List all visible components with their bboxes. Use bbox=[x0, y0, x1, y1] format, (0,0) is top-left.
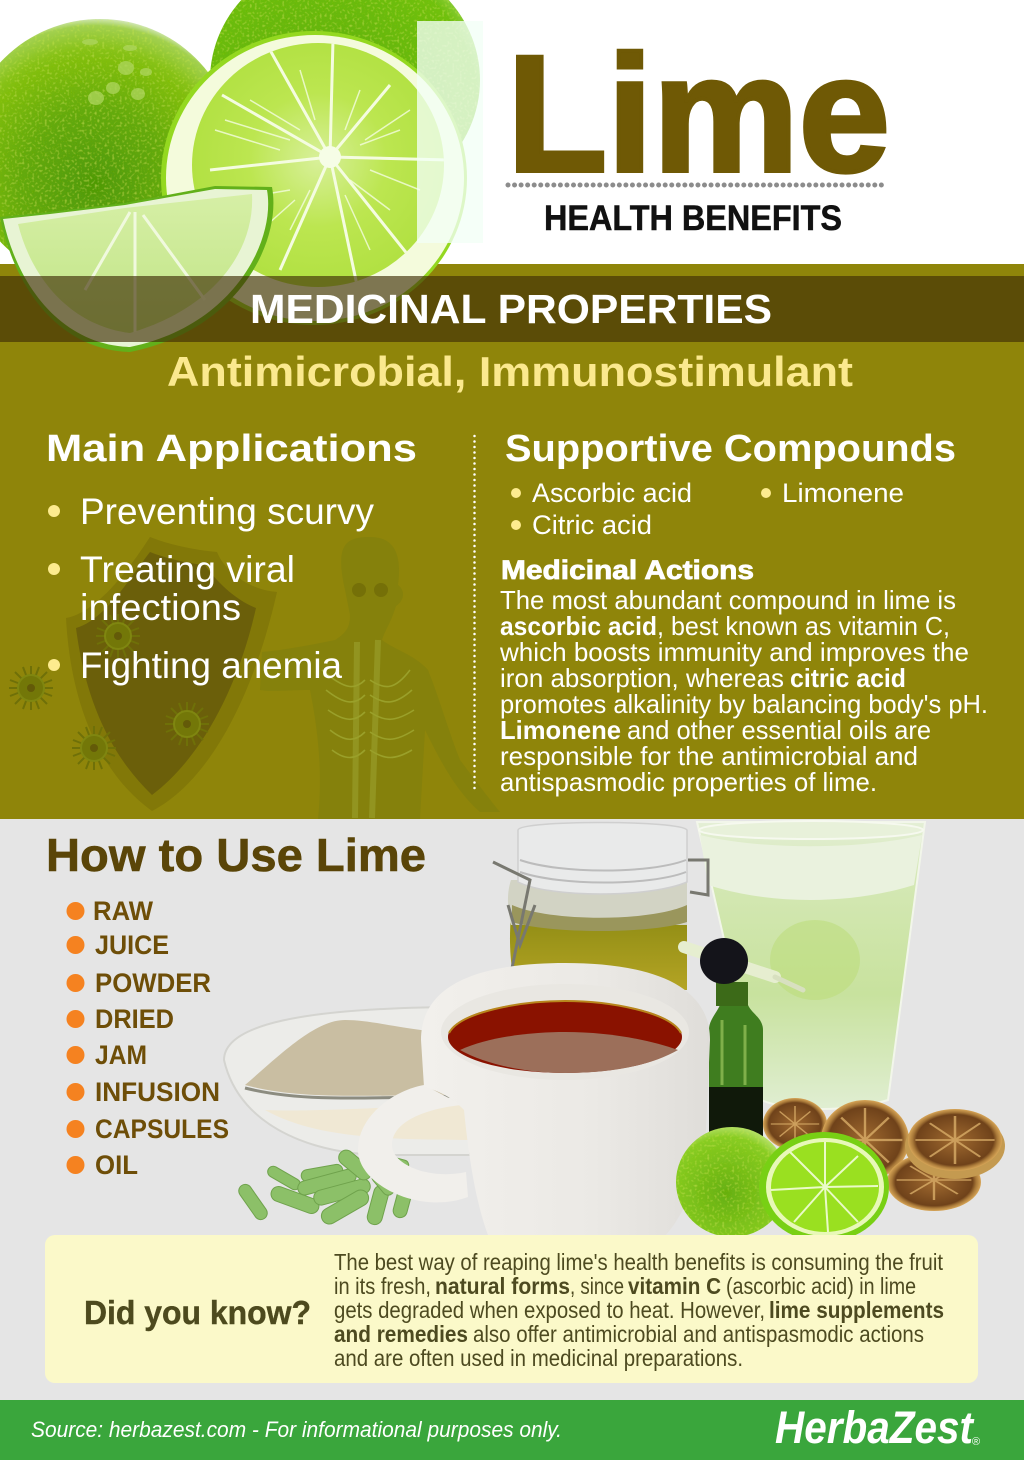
list: forms of use: DRIED bbox=[95, 1004, 174, 1034]
dotted column divider bbox=[473, 436, 476, 792]
item: treating viral infections bbox=[48, 549, 295, 628]
list: forms of use: JAM bbox=[95, 1040, 147, 1070]
text block: medicinal actions: responsible for the antimicrobial and bbox=[500, 741, 918, 771]
text block: medicinal actions: Limonene bbox=[500, 715, 621, 745]
viruses bbox=[9, 614, 209, 770]
text block: did you know: and remedies bbox=[334, 1321, 468, 1347]
list: compounds bbox=[511, 478, 904, 540]
illustration: lime preparations bbox=[224, 821, 1005, 1242]
logo: HerbaZest: ® bbox=[972, 1436, 980, 1448]
text block: medicinal actions: ascorbic acid bbox=[500, 611, 657, 641]
list: forms of use: RAW bbox=[93, 896, 153, 926]
lime wedge bbox=[0, 186, 273, 352]
text block: did you know bbox=[334, 1249, 944, 1371]
text block: medicinal actions: , best known as vitamin C, bbox=[657, 611, 950, 641]
jar of oil bbox=[493, 822, 708, 990]
heading: how to use lime: How to Use Lime bbox=[46, 829, 426, 881]
heading: supportive compounds: Supportive Compounds bbox=[505, 428, 956, 470]
text block: did you know: vitamin C bbox=[628, 1273, 721, 1299]
heading: did you know: Did you know? bbox=[84, 1294, 311, 1331]
text block: did you know: in its fresh, bbox=[334, 1273, 431, 1299]
text block: did you know: , since bbox=[570, 1273, 624, 1299]
text block: medicinal actions: and other essential oils are bbox=[627, 715, 931, 745]
halved lime bbox=[161, 31, 467, 325]
item: treating viral infections: infections bbox=[80, 587, 241, 628]
small lime half bbox=[759, 1132, 889, 1242]
text block: did you know: and are often used in medicinal preparations. bbox=[334, 1345, 743, 1371]
text block: did you know: natural forms bbox=[435, 1273, 570, 1299]
dotted divider under title bbox=[508, 182, 885, 188]
small whole lime bbox=[676, 1127, 788, 1237]
list: compounds: Limonene bbox=[782, 478, 904, 508]
text block: did you know: lime supplements bbox=[769, 1297, 944, 1323]
list: forms of use bbox=[66, 896, 229, 1180]
subheading: properties list: Antimicrobial, Immunostimulant bbox=[167, 348, 853, 395]
white header background bbox=[0, 0, 1024, 264]
list: compounds: Ascorbic acid bbox=[532, 478, 692, 508]
list: forms of use: CAPSULES bbox=[95, 1114, 229, 1144]
text block: medicinal actions: antispasmodic properties of lime. bbox=[500, 767, 877, 797]
item: preventing scurvy: Preventing scurvy bbox=[80, 491, 374, 532]
panel: did you know bbox=[45, 1235, 978, 1383]
item: treating viral infections: Treating viral bbox=[80, 549, 295, 590]
text block: did you know: gets degraded when exposed to heat. However, bbox=[334, 1297, 765, 1323]
title: Lime: Lime bbox=[507, 22, 890, 207]
white mug with tea bbox=[358, 963, 710, 1240]
human body bbox=[260, 537, 500, 819]
text block: medicinal actions: iron absorption, whereas bbox=[500, 663, 784, 693]
list: forms of use: POWDER bbox=[95, 968, 211, 998]
left whole lime bbox=[0, 19, 235, 285]
bowl of powder bbox=[224, 1007, 470, 1155]
heading: main applications: Main Applications bbox=[46, 428, 417, 470]
subtitle: health benefits: HEALTH BENEFITS bbox=[544, 199, 842, 238]
background illustration: shield, viruses and body bbox=[9, 537, 500, 819]
medicinal properties band bbox=[0, 276, 1024, 342]
illustration: limes bbox=[0, 0, 483, 352]
list: forms of use: JUICE bbox=[95, 930, 169, 960]
text block: did you know: (ascorbic acid) in lime bbox=[726, 1273, 916, 1299]
text block: medicinal actions bbox=[499, 585, 988, 797]
glass of lime juice bbox=[697, 821, 925, 1109]
text block: did you know: also offer antimicrobial and antispasmodic actions bbox=[473, 1321, 924, 1347]
text block: did you know: The best way of reaping lime's health benefits is consuming the fruit bbox=[334, 1249, 944, 1275]
panel: how to use background bbox=[0, 819, 1024, 1400]
heading: medicinal actions: Medicinal Actions bbox=[501, 555, 754, 585]
panel: medicinal properties background bbox=[0, 264, 1024, 819]
list: compounds: Citric acid bbox=[532, 510, 652, 540]
shield bbox=[66, 537, 277, 811]
item: fighting anemia: Fighting anemia bbox=[80, 645, 342, 686]
footer bbox=[0, 1400, 1024, 1460]
text block: medicinal actions: citric acid bbox=[790, 663, 906, 693]
dropper bottle bbox=[684, 938, 803, 1151]
back whole lime bbox=[210, 0, 480, 205]
translucent panel over lime bbox=[417, 21, 483, 243]
source note: Source: herbazest.com - For informational purposes only. bbox=[31, 1417, 562, 1442]
text block: medicinal actions: The most abundant compound in lime is bbox=[500, 585, 956, 615]
text block: medicinal actions: which boosts immunity and improves the bbox=[499, 637, 969, 667]
list: main applications bbox=[48, 491, 374, 686]
list: forms of use: INFUSION bbox=[95, 1077, 220, 1107]
text block: medicinal actions: promotes alkalinity by balancing body's pH. bbox=[500, 689, 988, 719]
list: forms of use: OIL bbox=[95, 1150, 138, 1180]
heading: medicinal properties: MEDICINAL PROPERTIES bbox=[250, 286, 772, 332]
logo: HerbaZest: HerbaZest bbox=[775, 1402, 975, 1453]
dried lime slices bbox=[763, 1098, 1005, 1211]
capsules bbox=[236, 1147, 414, 1227]
